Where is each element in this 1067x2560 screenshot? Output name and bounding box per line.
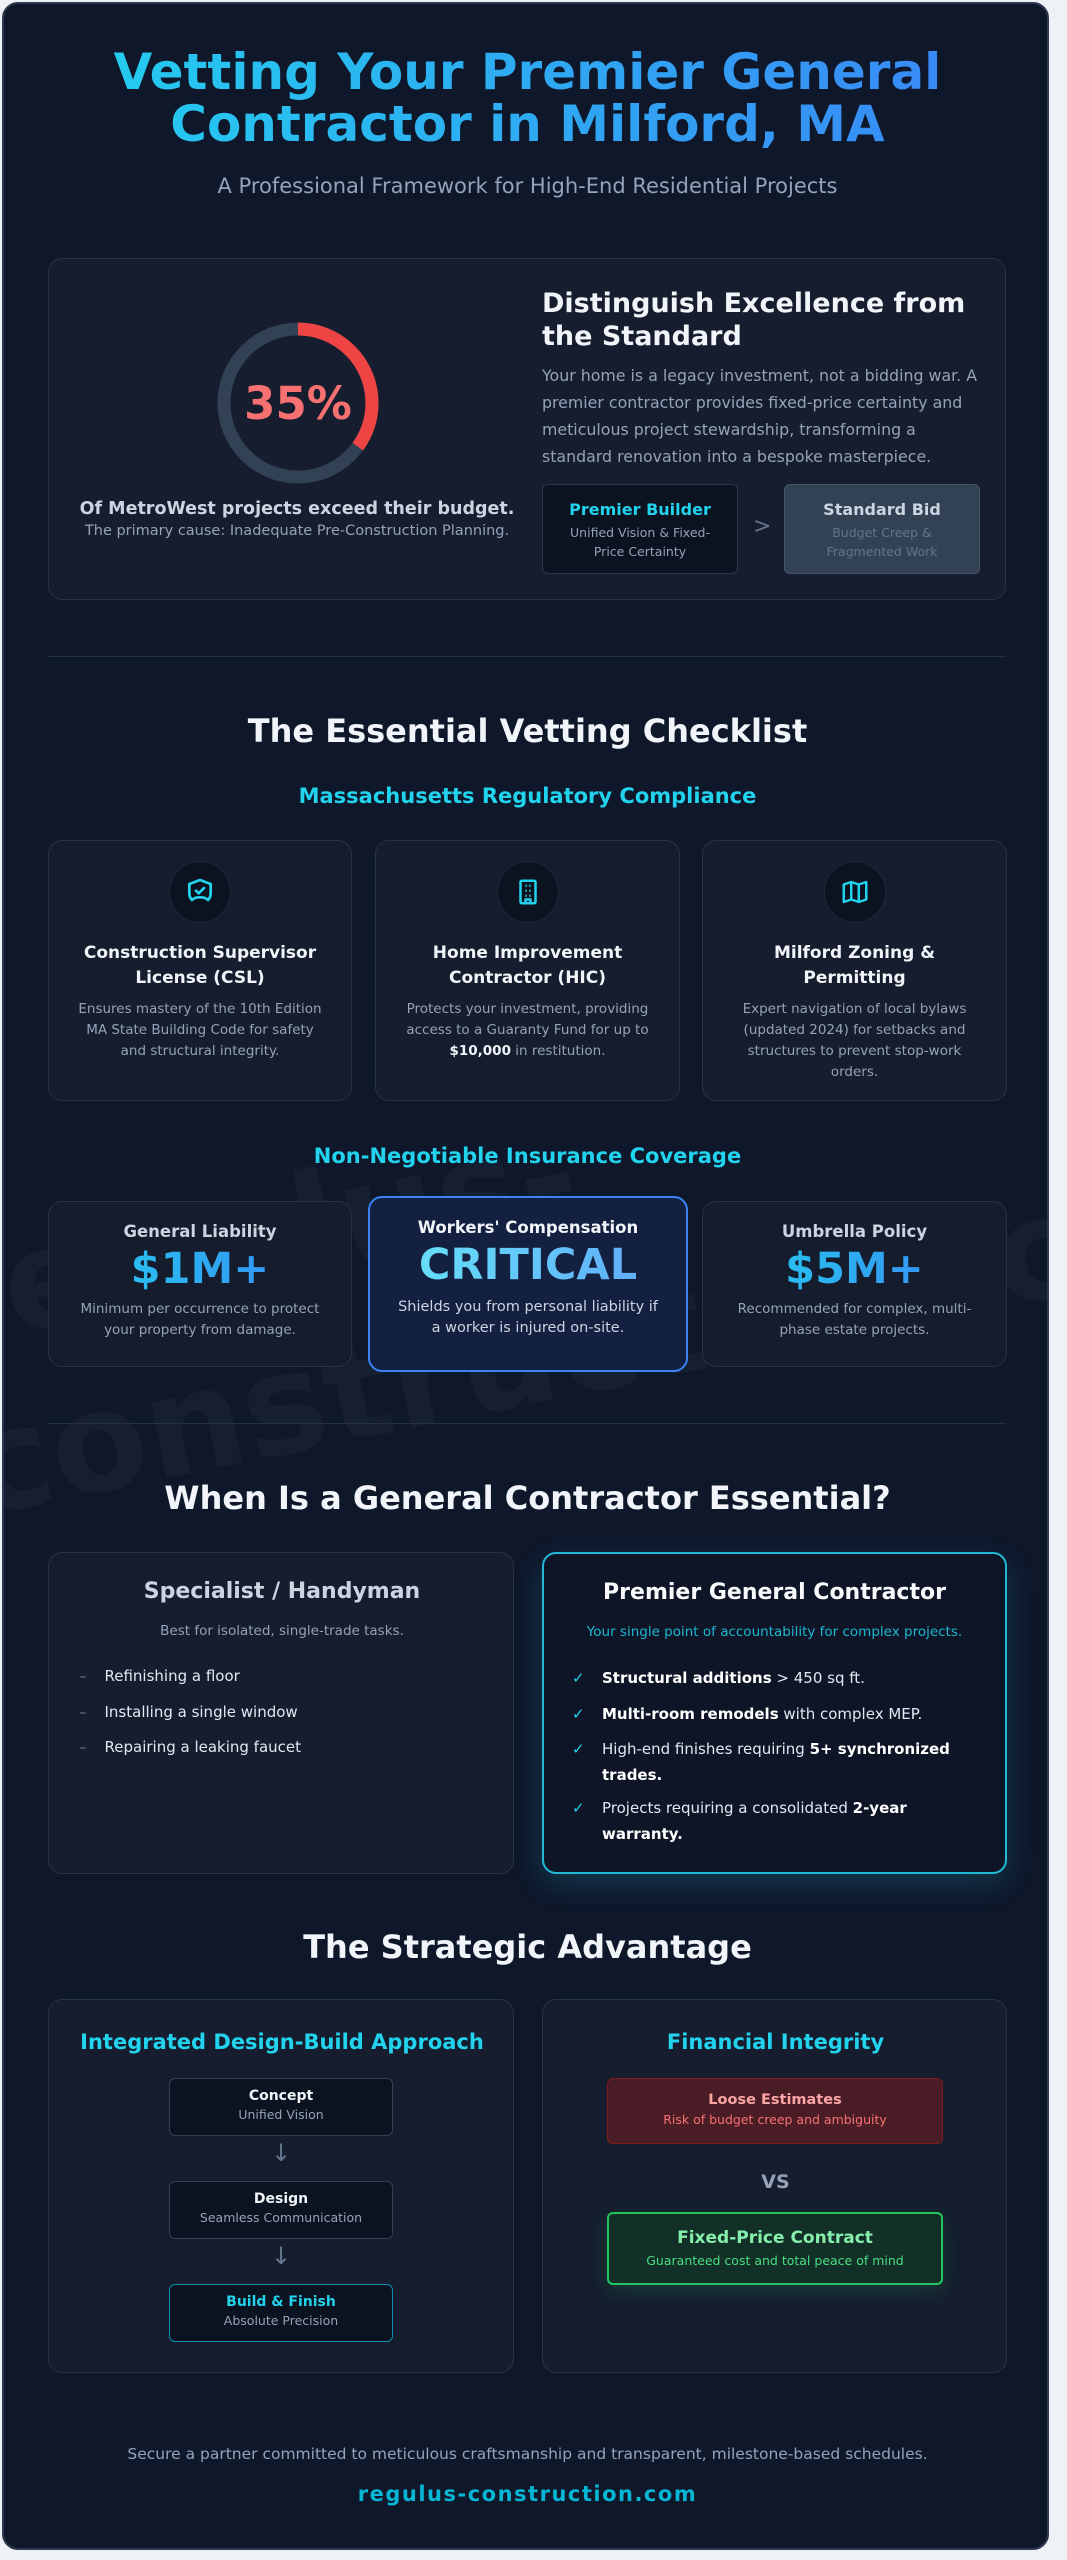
arrow: > bbox=[753, 514, 771, 539]
card: HIC: Home Improvement bbox=[433, 943, 622, 963]
card: CSL: Ensures mastery of the 10th Edition MA State Building Code for safety and structural integrity. bbox=[78, 1001, 322, 1059]
hero paragraph: Your home is a legacy investment, not a bidding war. A premier contractor provides fixed-price certainty and meticulous project stewardship, transforming a standard renovation into a bespoke masterpiece. bbox=[542, 366, 977, 466]
panel: handyman bbox=[48, 1552, 514, 1874]
list: – Refinishing a floor bbox=[79, 1667, 240, 1685]
list: – Repairing a leaking faucet bbox=[79, 1738, 301, 1756]
heading: strategic advantage: The Strategic Advantage bbox=[303, 1928, 752, 1966]
arrow: ↓ bbox=[271, 2139, 291, 2167]
footer url: regulus-construction.com bbox=[358, 2482, 697, 2506]
card: umbrella: $5M+ bbox=[785, 1244, 924, 1294]
panel: design-build bbox=[48, 1999, 514, 2373]
list: – Installing a single window bbox=[79, 1703, 298, 1721]
card: general liability: $1M+ bbox=[131, 1244, 269, 1294]
premier builder box: Premier Builder bbox=[569, 500, 711, 519]
card: general liability bbox=[48, 1201, 352, 1367]
premier builder box bbox=[542, 484, 738, 574]
step: design: Design bbox=[254, 2191, 308, 2207]
donut chart bbox=[218, 322, 378, 484]
vs: VS bbox=[761, 2171, 790, 2193]
step: concept bbox=[169, 2078, 393, 2136]
card: CSL: License (CSL) bbox=[135, 968, 265, 988]
card: CSL: Construction Supervisor bbox=[84, 943, 316, 963]
panel: hero bbox=[48, 258, 1006, 600]
step: build: Build & Finish bbox=[226, 2294, 336, 2310]
watermark bbox=[0, 941, 1067, 1553]
card: workers comp: CRITICAL bbox=[419, 1240, 637, 1290]
checklist: ✓ bbox=[572, 1740, 585, 1758]
subheading: compliance: Massachusetts Regulatory Compliance bbox=[299, 784, 756, 808]
loose estimates bbox=[607, 2078, 943, 2144]
checklist: ✓ bbox=[572, 1705, 585, 1723]
title: Vetting Your Premier General bbox=[114, 43, 941, 101]
card: workers comp: Workers' Compensation bbox=[418, 1218, 638, 1237]
card: umbrella: Recommended for complex, multi-phase estate projects. bbox=[738, 1301, 971, 1338]
premier builder box: Price Certainty bbox=[594, 544, 686, 559]
panel: premier GC: Premier General Contractor bbox=[603, 1580, 946, 1605]
loose estimates: Loose Estimates bbox=[708, 2092, 842, 2108]
checklist: Structural additions > 450 sq ft. bbox=[602, 1669, 865, 1687]
fixed price bbox=[607, 2212, 943, 2285]
fixed price: Fixed-Price Contract bbox=[677, 2228, 873, 2248]
checklist: ✓ bbox=[572, 1799, 585, 1817]
loose estimates: Risk of budget creep and ambiguity bbox=[663, 2112, 887, 2127]
panel: handyman: Best for isolated, single-trade tasks. bbox=[160, 1623, 404, 1639]
panel: financial integrity bbox=[542, 1999, 1007, 2373]
checklist: Multi-room remodels with complex MEP. bbox=[602, 1705, 922, 1723]
premier builder box: Unified Vision & Fixed- bbox=[570, 525, 710, 540]
fixed price: Guaranteed cost and total peace of mind bbox=[646, 2253, 904, 2268]
card: general liability: Minimum per occurrence to protect your property from damage. bbox=[81, 1301, 319, 1338]
heading: when essential: When Is a General Contractor Essential? bbox=[164, 1479, 891, 1517]
step: concept: Concept bbox=[249, 2088, 313, 2104]
footer text: Secure a partner committed to meticulous craftsmanship and transparent, milestone-based schedules. bbox=[127, 2445, 928, 2463]
stat caption: Of MetroWest projects exceed their budget. bbox=[80, 499, 514, 519]
card: workers comp bbox=[368, 1196, 688, 1372]
card: HIC bbox=[375, 840, 680, 1101]
hero heading: Distinguish Excellence from the Standard bbox=[542, 288, 965, 352]
checklist: ✓ bbox=[572, 1669, 585, 1687]
panel: handyman: Specialist / Handyman bbox=[144, 1579, 420, 1604]
card: HIC: Protects your investment, providing access to a Guaranty Fund for up to $10,000 in restitution. bbox=[406, 1001, 649, 1059]
stat caption: The primary cause: Inadequate Pre-Construction Planning. bbox=[85, 523, 509, 539]
panel: premier GC: Your single point of accountability for complex projects. bbox=[587, 1624, 962, 1640]
card: zoning: Milford Zoning & bbox=[774, 943, 935, 963]
checklist bbox=[572, 1669, 950, 1843]
panel: financial integrity: Financial Integrity bbox=[667, 2030, 884, 2054]
panel: design-build: Integrated Design-Build Approach bbox=[80, 2030, 484, 2054]
card: zoning: Permitting bbox=[803, 968, 906, 988]
standard bid box: Fragmented Work bbox=[827, 544, 937, 559]
card: umbrella: Umbrella Policy bbox=[782, 1222, 927, 1241]
standard bid box bbox=[784, 484, 980, 574]
icon: map bbox=[824, 861, 886, 923]
checklist: High-end finishes requiring 5+ synchronized trades. bbox=[602, 1740, 950, 1784]
list bbox=[79, 1667, 301, 1756]
card: zoning: Expert navigation of local bylaws (updated 2024) for setbacks and structures to prevent stop-work orders. bbox=[743, 1001, 966, 1080]
arrow: ↓ bbox=[271, 2242, 291, 2270]
step: concept: Unified Vision bbox=[238, 2107, 324, 2122]
card: workers comp: Shields you from personal liability if a worker is injured on-site. bbox=[398, 1299, 658, 1336]
card: HIC: Contractor (HIC) bbox=[449, 968, 606, 988]
title bbox=[4, 46, 1051, 150]
step: build: Absolute Precision bbox=[224, 2313, 338, 2328]
checklist: Projects requiring a consolidated 2-year warranty. bbox=[602, 1799, 907, 1843]
icon: shield bbox=[169, 861, 231, 923]
panel: premier GC bbox=[542, 1552, 1007, 1874]
step: build bbox=[169, 2284, 393, 2342]
standard bid box: Budget Creep & bbox=[832, 525, 932, 540]
card: umbrella bbox=[702, 1201, 1007, 1367]
step: design: Seamless Communication bbox=[200, 2210, 362, 2225]
card: zoning bbox=[702, 840, 1007, 1101]
icon: building bbox=[496, 861, 558, 923]
standard bid box: Standard Bid bbox=[823, 500, 941, 519]
heading: checklist: The Essential Vetting Checklist bbox=[248, 712, 807, 750]
card: CSL bbox=[48, 840, 352, 1101]
title: Contractor in Milford, MA bbox=[170, 95, 885, 153]
step: design bbox=[169, 2181, 393, 2239]
subtitle: A Professional Framework for High-End Residential Projects bbox=[218, 174, 837, 198]
card: general liability: General Liability bbox=[123, 1222, 277, 1241]
donut chart: 35% bbox=[244, 377, 352, 430]
subheading: insurance: Non-Negotiable Insurance Coverage bbox=[314, 1144, 741, 1168]
stat caption bbox=[80, 499, 514, 539]
